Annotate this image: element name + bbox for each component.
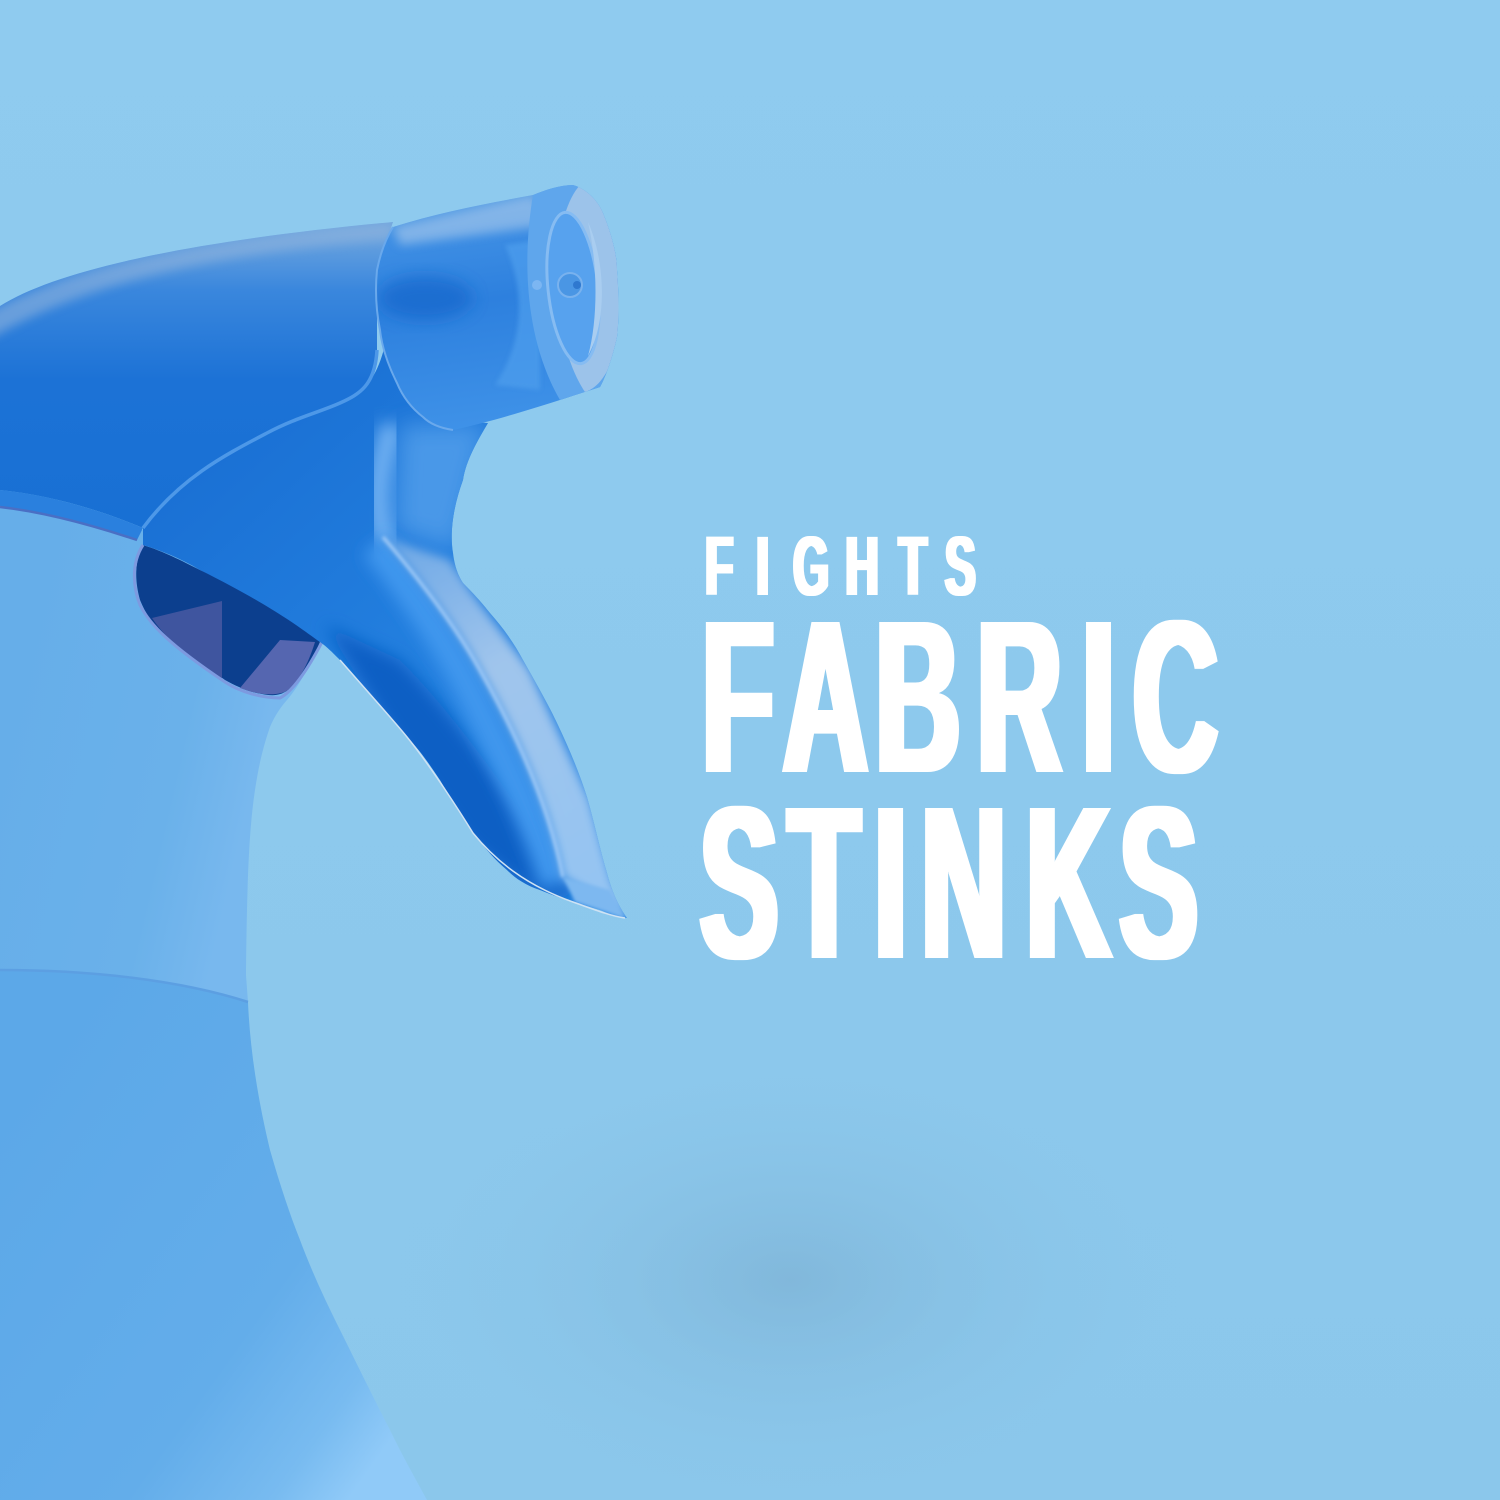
spray bottle [0, 180, 630, 1500]
nozzle cap band [528, 185, 606, 400]
window right panel [240, 640, 315, 694]
trigger ridge [143, 350, 377, 528]
nozzle top rim [393, 195, 550, 245]
bottle lower body [0, 970, 427, 1500]
cap front inner [545, 210, 600, 365]
light stripe [383, 537, 563, 877]
nozzle leaf [495, 240, 540, 390]
mid bright band [375, 545, 555, 885]
cap inner pale crescent [588, 222, 602, 356]
neck collar line [0, 970, 248, 1002]
shroud bottom band [0, 490, 143, 540]
shroud [0, 222, 393, 528]
nozzle left seam [376, 227, 453, 430]
floor shadow [390, 1040, 1190, 1500]
nozzle [376, 180, 630, 430]
trigger [143, 345, 630, 920]
nozzle dark stripe [377, 276, 473, 320]
trigger shading group [325, 423, 630, 920]
nozzle orifice [532, 273, 582, 297]
window dark interior [136, 545, 320, 695]
FIGHTS: FIGHTS [705, 521, 976, 614]
nozzle shading group [377, 180, 630, 400]
upper highlight [395, 423, 488, 550]
window purple panel [152, 601, 222, 680]
trigger lower edge highlight [340, 660, 625, 918]
STINKS: STINKS [700, 761, 1198, 1005]
cap front pale ring [566, 187, 618, 392]
headline [700, 521, 1218, 1005]
vertical light band [378, 425, 392, 545]
shroud light rim [0, 222, 393, 345]
tip [563, 877, 625, 918]
band lower line [0, 507, 137, 540]
bottle neck [0, 480, 320, 1002]
window rim [134, 545, 322, 698]
dark lower band [325, 625, 575, 900]
pale facet [383, 537, 630, 920]
trigger window [134, 545, 322, 698]
FABRIC: FABRIC [702, 575, 1218, 819]
